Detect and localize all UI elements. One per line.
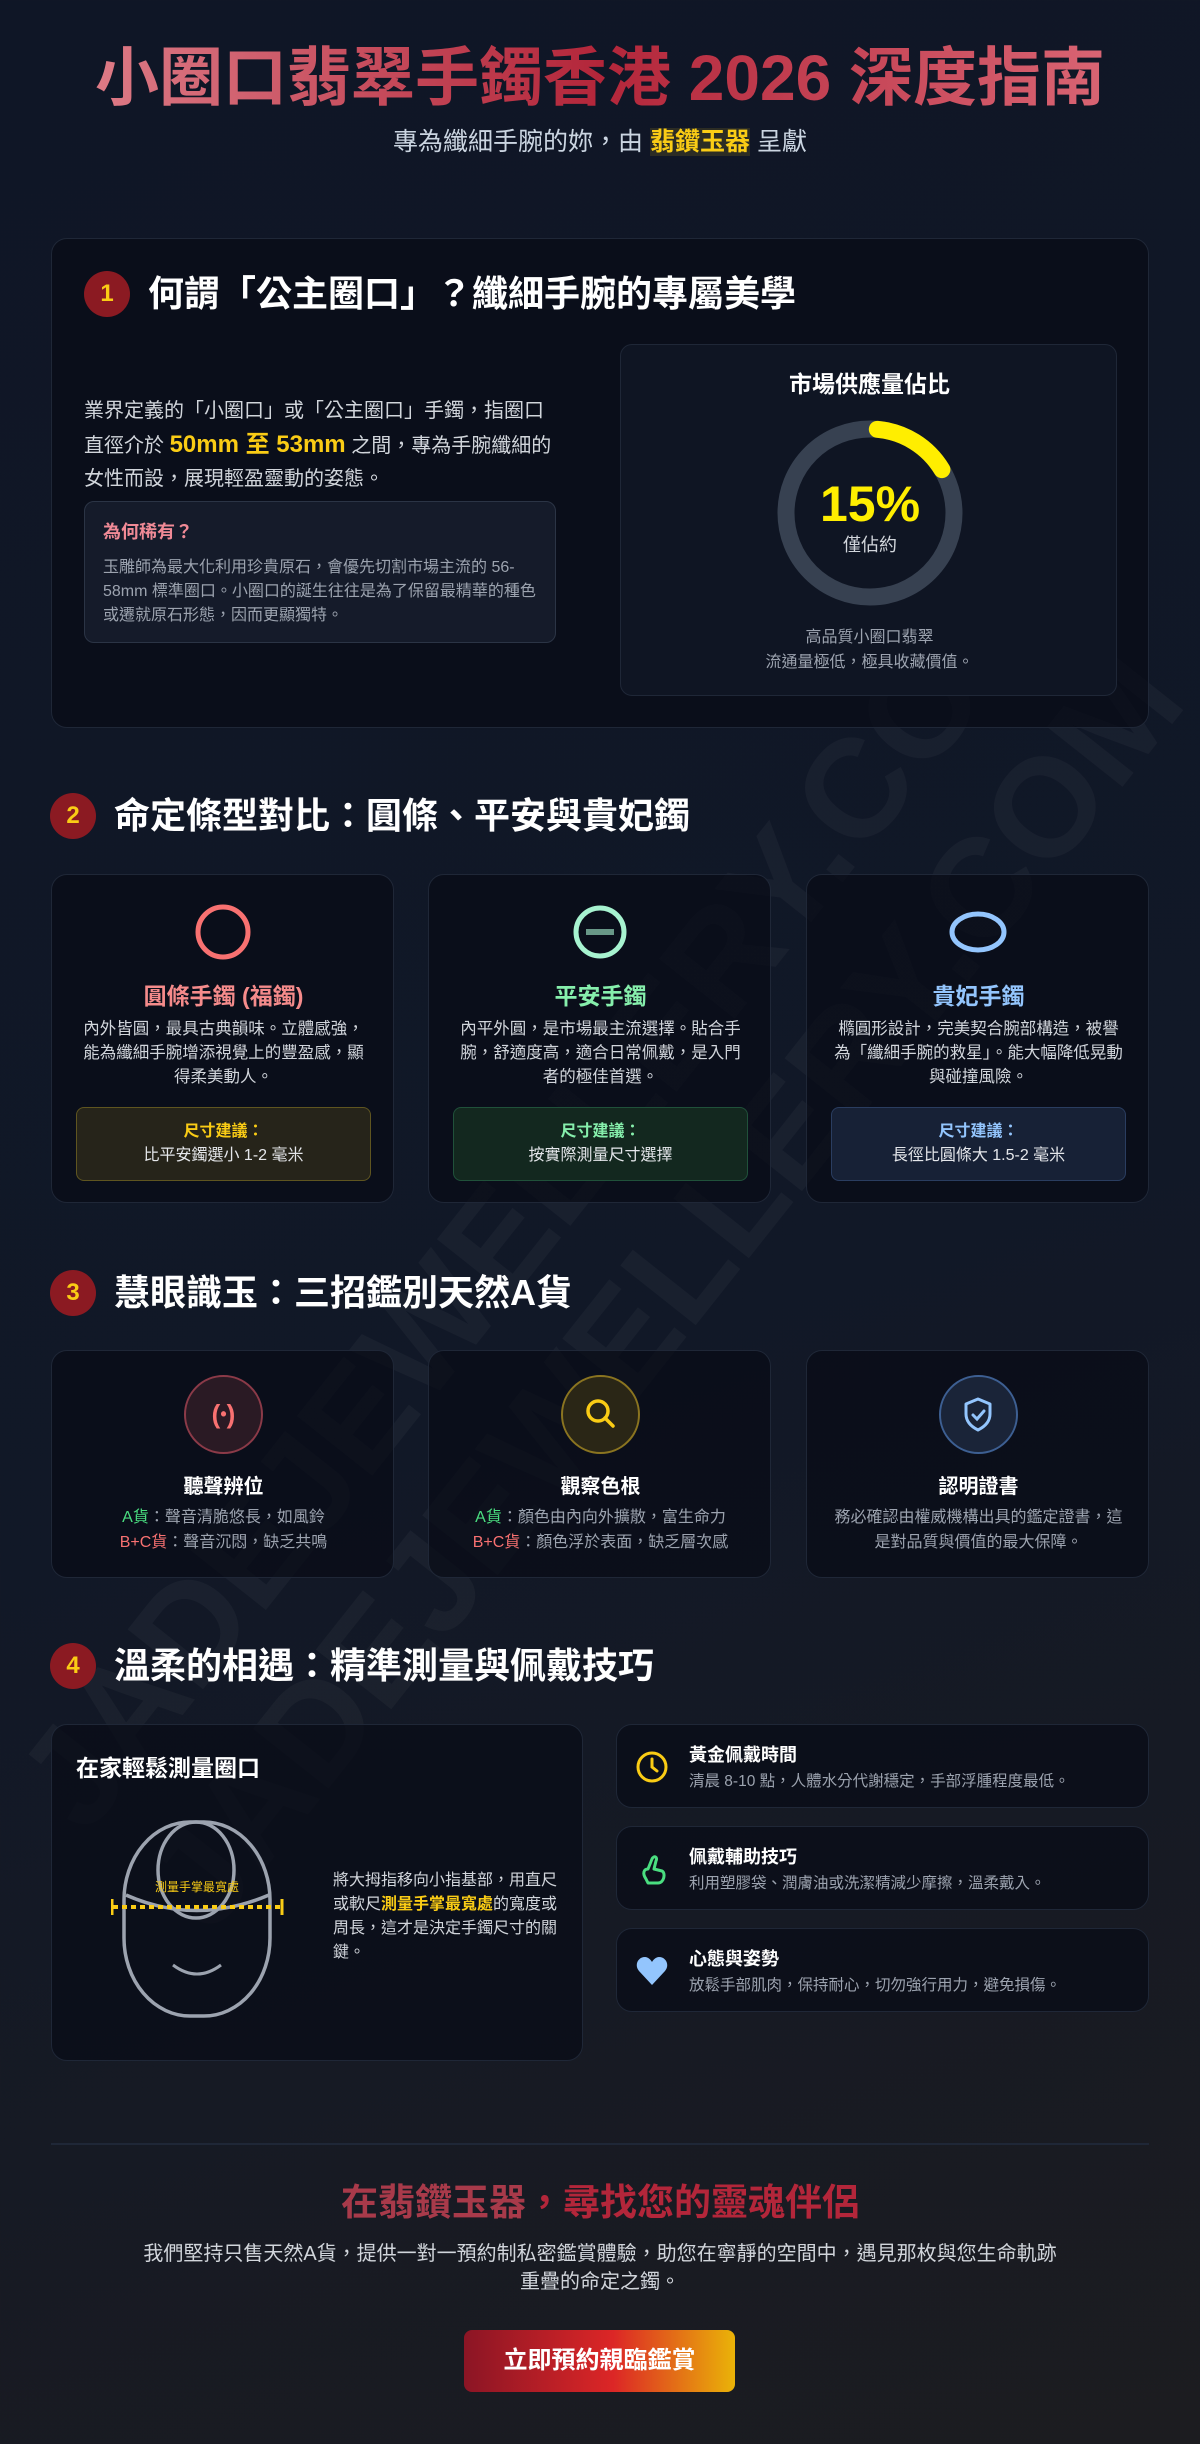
callout: why rare: 為何稀有？ — [103, 522, 193, 542]
panel: guifei bangle — [806, 874, 1149, 1203]
icon: sound: () — [212, 1399, 235, 1429]
panel: guifei bangle: 橢圓形設計，完美契合腕部構造，被譽為「纖細手腕的救星」。能大幅降低晃動與碰撞風險。 — [834, 1020, 1123, 1086]
hand diagram: 測量手掌最寬處 — [155, 1879, 239, 1894]
panel: color root — [428, 1350, 771, 1578]
size tip: 按實際測量尺寸選擇 — [528, 1147, 672, 1164]
panel: guifei bangle: 貴妃手鐲 — [932, 983, 1024, 1009]
chart: supply donut: 流通量極低，極具收藏價值。 — [765, 654, 974, 671]
callout: why rare — [84, 501, 556, 643]
icon: clock — [636, 1752, 668, 1782]
size tip: 尺寸建議： — [938, 1123, 1018, 1140]
subtitle: 專為纖細手腕的妳，由 翡鑽玉器 呈獻 — [393, 128, 807, 156]
icon: hand — [642, 1855, 666, 1884]
icon: shield — [939, 1375, 1018, 1454]
size tip: 尺寸建議： — [183, 1123, 264, 1140]
watermark: JADEJEWELLERY.COM — [0, 525, 1087, 1855]
heading 1: 何謂「公主圈口」？纖細手腕的專屬美學 — [148, 273, 796, 314]
panel: ping an bangle: 平安手鐲 — [554, 983, 646, 1009]
size tip: 尺寸建議： — [560, 1123, 640, 1140]
hand diagram — [111, 1820, 284, 2018]
panel: ping an bangle — [428, 874, 771, 1203]
tip: mindset: 心態與姿勢 — [689, 1949, 779, 1969]
panel: color root: A貨：顏色由內向外擴散，富生命力 — [475, 1509, 726, 1526]
panel: round bangle: 內外皆圓，最具古典韻味。立體感強，能為纖細手腕增添視覺上的豐盈感，顯得柔美動人。 — [83, 1020, 364, 1086]
heading 3: 3 — [66, 1279, 80, 1306]
chart: supply donut: 市場供應量佔比 — [789, 371, 950, 397]
panel: color root: B+C貨：顏色浮於表面，缺乏層次感 — [473, 1534, 728, 1551]
tip: golden time: 黃金佩戴時間 — [689, 1745, 797, 1765]
icon: magnifier — [561, 1375, 640, 1454]
CTA button: 立即預約親臨鑑賞 — [504, 2347, 696, 2374]
heading 1: 1 — [100, 280, 114, 307]
chart: supply donut: 高品質小圈口翡翠 — [805, 629, 934, 646]
icon: oval ring — [950, 912, 1006, 952]
panel: certificate: 務必確認由權威機構出具的鑑定證書，這是對品質與價值的最大保障。 — [834, 1509, 1122, 1551]
size tip: 比平安鐲選小 1-2 毫米 — [143, 1147, 304, 1164]
callout: why rare: 玉雕師為最大化利用珍貴原石，會優先切割市場主流的 56-58mm 標準圈口。小圈口的誕生往往是為了保留最精華的種色或遷就原石形態，因而更顯獨特。 — [103, 559, 536, 624]
panel: sound test — [51, 1350, 394, 1578]
icon: heart — [636, 1957, 668, 1985]
icon: round ring — [196, 904, 250, 960]
heading 3: 慧眼識玉：三招鑑別天然A貨 — [114, 1272, 572, 1313]
heading 4: 溫柔的相遇：精準測量與佩戴技巧 — [114, 1645, 654, 1686]
panel: section 1 — [51, 238, 1149, 728]
chart: supply donut — [620, 344, 1117, 696]
icon: sound: • — [220, 1404, 227, 1424]
heading 4: 4 — [66, 1652, 80, 1679]
size tip: 長徑比圓條大 1.5-2 毫米 — [892, 1147, 1065, 1164]
tip: golden time — [616, 1724, 1149, 1808]
size tip — [831, 1107, 1126, 1181]
size tip — [76, 1107, 371, 1181]
CTA heading: 在翡鑽玉器，尋找您的靈魂伴侶 — [341, 2182, 859, 2223]
tip: mindset — [616, 1928, 1149, 2012]
panel: ping an bangle: 內平外圓，是市場最主流選擇。貼合手腕，舒適度高，適合日常佩戴，是入門者的極佳首選。 — [460, 1020, 741, 1086]
panel: round bangle: 圓條手鐲 (福鐲) — [144, 983, 303, 1009]
panel: sound test: 聽聲辨位 — [184, 1476, 264, 1498]
heading 2: 命定條型對比：圓條、平安與貴妃鐲 — [114, 795, 690, 836]
tip: aid: 佩戴輔助技巧 — [689, 1847, 797, 1867]
tip: golden time: 清晨 8-10 點，人體水分代謝穩定，手部浮腫程度最低。 — [689, 1773, 1070, 1790]
watermark — [0, 357, 1200, 2123]
panel: measure: 在家輕鬆測量圈口 — [76, 1755, 260, 1781]
panel: certificate — [806, 1350, 1149, 1578]
size tip — [453, 1107, 748, 1181]
panel: color root: 觀察色根 — [560, 1476, 640, 1498]
CTA button — [464, 2330, 735, 2392]
icon: sound — [184, 1375, 263, 1454]
watermark: JADEJEWELLERY.COM — [112, 624, 1200, 1955]
panel: sound test: A貨：聲音清脆悠長，如風鈴 — [122, 1509, 325, 1526]
panel: round bangle — [51, 874, 394, 1203]
chart: supply donut: 僅佔約 — [843, 535, 897, 555]
panel: measure — [51, 1724, 583, 2061]
tip: aid: 利用塑膠袋、潤膚油或洗潔精減少摩擦，溫柔戴入。 — [689, 1875, 1046, 1892]
panel: certificate: 認明證書 — [938, 1476, 1018, 1498]
CTA text: 我們堅持只售天然A貨，提供一對一預約制私密鑑賞體驗，助您在寧靜的空間中，遇見那枚與您生命軌跡重疊的命定之鐲。 — [143, 2243, 1057, 2293]
tip: aid — [616, 1826, 1149, 1910]
intro text: 業界定義的「小圈口」或「公主圈口」手鐲，指圈口直徑介於 50mm 至 53mm 之間，專為手腕纖細的女性而設，展現輕盈靈動的姿態。 — [84, 400, 551, 490]
measure text: 將大拇指移向小指基部，用直尺或軟尺測量手掌最寬處的寬度或周長，這才是決定手鐲尺寸的關鍵。 — [333, 1872, 557, 1961]
heading 2: 2 — [66, 802, 80, 829]
panel: sound test: B+C貨：聲音沉悶，缺乏共鳴 — [120, 1534, 327, 1551]
tip: mindset: 放鬆手部肌肉，保持耐心，切勿強行用力，避免損傷。 — [689, 1977, 1061, 1994]
chart: supply donut: 15% — [820, 476, 920, 532]
icon: flat ring — [574, 906, 626, 958]
title: 小圈口翡翠手鐲香港 2026 深度指南 — [95, 42, 1105, 114]
